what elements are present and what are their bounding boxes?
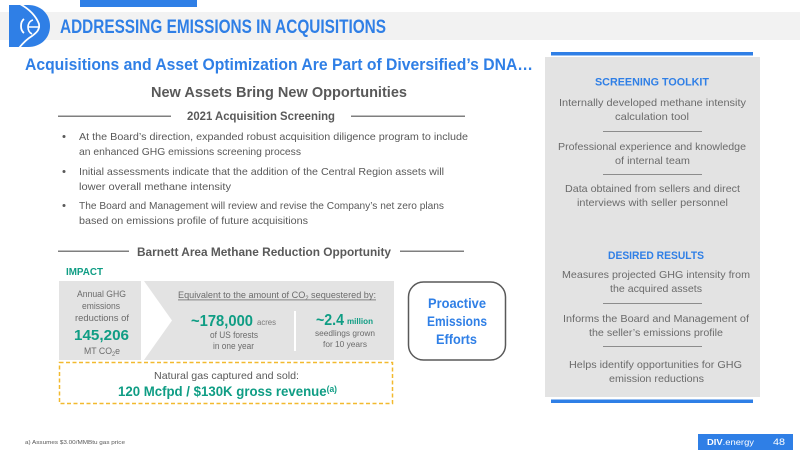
panel: annual GHG reductions — [59, 281, 141, 360]
heading: desired results: DESIRED RESULTS — [608, 250, 704, 262]
list: desired results items: Helps identify opportunities for GHG — [569, 359, 742, 371]
heading: new assets: New Assets Bring New Opportunities — [151, 84, 407, 101]
panel: annual GHG reductions: 2 — [112, 352, 116, 358]
list: screening toolkit items — [558, 97, 747, 209]
callout: natural gas captured: Natural gas captured and sold: — [154, 370, 299, 382]
header band — [0, 12, 800, 40]
panel: annual GHG reductions: reductions of — [75, 313, 129, 324]
callout: proactive emissions efforts — [408, 282, 506, 360]
footer badge — [698, 434, 793, 450]
list: screening toolkit items: interviews with seller personnel — [577, 197, 728, 209]
panel: annual GHG reductions: MT CO — [84, 346, 114, 357]
list: screening toolkit items: Data obtained from sellers and direct — [565, 183, 740, 195]
footer badge: DIV .energy — [707, 438, 754, 447]
panel: CO2 sequestration equivalents: ~2.4 — [316, 312, 344, 329]
bullet list: screening: At the Board’s direction, expanded robust acquisition diligence program to include — [79, 131, 468, 143]
callout: proactive emissions efforts: Emissions — [427, 313, 487, 329]
callout: natural gas captured: 120 Mcfpd / $130K gross revenue — [118, 383, 339, 399]
panel: CO2 sequestration equivalents: 2 — [305, 296, 309, 302]
section heading: Barnett area: Barnett Area Methane Reduction Opportunity — [137, 245, 391, 259]
bullet list: screening: based on emissions profile of future acquisitions — [79, 215, 308, 227]
panel: CO2 sequestration equivalents: sequestered by: — [309, 290, 376, 301]
bullet list: screening — [62, 131, 468, 227]
list: desired results items: emission reductions — [609, 373, 704, 385]
bullet list: screening: an enhanced GHG emissions screening process — [79, 146, 301, 158]
panel: CO2 sequestration equivalents — [144, 281, 394, 360]
panel: CO2 sequestration equivalents: seedlings grown — [315, 328, 375, 338]
list: screening toolkit items: of internal team — [615, 155, 690, 167]
panel: annual GHG reductions: Annual GHG — [77, 289, 126, 300]
bullet list: screening: Initial assessments indicate that the addition of the Central Region assets will — [79, 166, 444, 178]
panel: CO2 sequestration equivalents: Equivalent to the amount of CO — [178, 290, 311, 301]
list: screening toolkit items: Professional experience and knowledge — [558, 141, 746, 153]
list: desired results items: the acquired assets — [610, 283, 702, 295]
title: ADDRESSING EMISSIONS IN ACQUISITIONS — [60, 17, 386, 38]
panel: annual GHG reductions: emissions — [82, 301, 120, 312]
bullet list: screening: The Board and Management will review and revise the Company’s net zero plans — [79, 200, 444, 212]
impact label: IMPACT — [66, 267, 103, 278]
panel: CO2 sequestration equivalents: ~178,000 — [191, 313, 253, 330]
list: desired results items: Informs the Board and Management of — [563, 313, 749, 325]
list: screening toolkit items: Internally developed methane intensity — [559, 97, 747, 109]
heading: screening toolkit: SCREENING TOOLKIT — [595, 76, 709, 88]
callout: proactive emissions efforts: Efforts — [436, 331, 477, 347]
callout: natural gas captured: (a) — [327, 384, 337, 394]
panel: annual GHG reductions: 145,206 — [74, 327, 129, 344]
footer badge: 48 — [773, 437, 785, 447]
panel: CO2 sequestration equivalents: million — [347, 317, 373, 326]
list: screening toolkit items: calculation tool — [615, 111, 689, 123]
callout: natural gas captured — [60, 362, 392, 404]
panel: CO2 sequestration equivalents: for 10 years — [323, 339, 367, 349]
list: desired results items: the seller’s emissions profile — [589, 327, 723, 339]
panel: CO2 sequestration equivalents: of US forests — [210, 330, 258, 340]
bullet list: screening: lower overall methane intensity — [79, 181, 232, 193]
section heading: 2021 acquisition screening: 2021 Acquisition Screening — [187, 109, 335, 123]
list: desired results items: Measures projected GHG intensity from — [562, 269, 750, 281]
callout: proactive emissions efforts: Proactive — [428, 295, 486, 311]
top accent bar — [80, 0, 197, 7]
panel: CO2 sequestration equivalents: acres — [257, 318, 276, 327]
panel: CO2 sequestration equivalents: in one year — [213, 341, 254, 351]
icon: company logo — [9, 4, 50, 48]
list: desired results items — [562, 269, 750, 385]
panel: annual GHG reductions: e — [115, 346, 120, 357]
footnote: a) Assumes $3.00/MMBtu gas price — [25, 440, 125, 446]
subtitle: Acquisitions and Asset Optimization Are Part of Diversified’s DNA… — [25, 56, 533, 74]
panel: right sidebar — [545, 52, 760, 403]
